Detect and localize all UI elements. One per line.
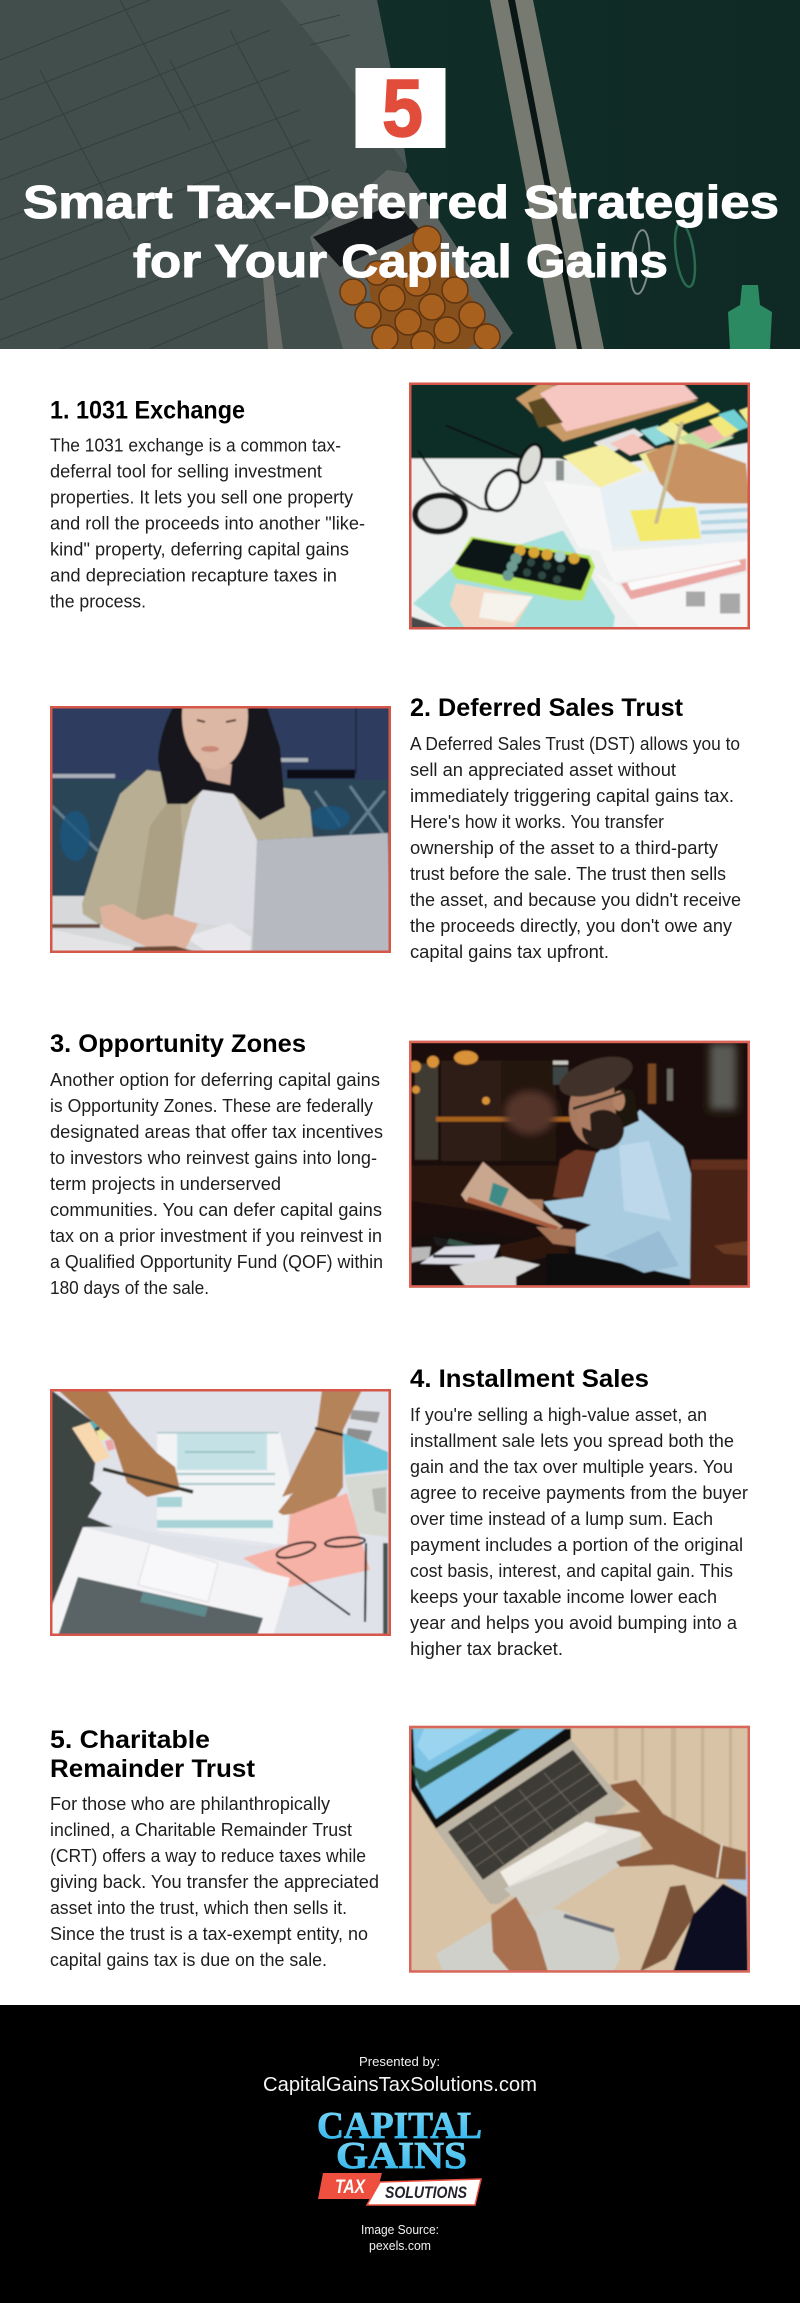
- logo: [317, 2105, 482, 2205]
- photo 1: desk with calculator, glasses and hand: [409, 382, 750, 630]
- logo: TAX: [335, 2177, 366, 2198]
- section 1 text: kind" property, deferring capital gains: [50, 540, 349, 560]
- section 5 text: capital gains tax is due on the sale.: [50, 1950, 327, 1970]
- section 2 text: ownership of the asset to a third-party: [410, 838, 718, 858]
- section 2 text: trust before the sale. The trust then sells: [410, 864, 726, 884]
- section 5 text: inclined, a Charitable Remainder Trust: [50, 1820, 352, 1840]
- section 4 text: 4. Installment Sales: [410, 1365, 649, 1393]
- section 1 text: and roll the proceeds into another "like-: [50, 514, 365, 534]
- image source: [361, 2222, 439, 2253]
- section 4 text: keeps your taxable income lower each: [410, 1587, 717, 1607]
- photo frame: [410, 384, 749, 628]
- section 5 text: asset into the trust, which then sells it.: [50, 1898, 347, 1918]
- footer panel: [0, 2005, 800, 2303]
- photo frame: [51, 707, 390, 952]
- section 2 text: capital gains tax upfront.: [410, 942, 609, 962]
- section 4 text: agree to receive payments from the buyer: [410, 1483, 748, 1503]
- title: Smart Tax-Deferred Strategies: [23, 176, 779, 228]
- photo 3: man reading newspaper: [409, 1041, 750, 1288]
- section 3 text: Another option for deferring capital gains: [50, 1070, 380, 1090]
- photo 4: hands filling form beside laptop: [50, 1389, 391, 1636]
- section 1 text: and depreciation recapture taxes in: [50, 566, 337, 586]
- section 5 text: 5. Charitable: [50, 1726, 210, 1754]
- image source: pexels.com: [369, 2238, 431, 2253]
- section 5 text: For those who are philanthropically: [50, 1794, 330, 1814]
- section 4 text: higher tax bracket.: [410, 1639, 563, 1659]
- section 5 text: giving back. You transfer the appreciated: [50, 1872, 379, 1892]
- logo: GAINS: [336, 2135, 467, 2177]
- logo: SOLUTIONS: [385, 2183, 468, 2202]
- section 3 text: to investors who reinvest gains into long-: [50, 1148, 377, 1168]
- website url: CapitalGainsTaxSolutions.com: [263, 2074, 537, 2096]
- section 3 text: 180 days of the sale.: [50, 1278, 209, 1298]
- section 1 text: [50, 396, 365, 612]
- logo: CAPITAL: [317, 2105, 482, 2147]
- section 1 text: The 1031 exchange is a common tax-: [50, 436, 341, 456]
- section 4 text: payment includes a portion of the original: [410, 1535, 743, 1555]
- header photo: calculator: [310, 170, 513, 355]
- section 2 text: the proceeds directly, you don't owe any: [410, 916, 732, 936]
- section 3 text: designated areas that offer tax incentives: [50, 1122, 383, 1142]
- section 4 text: [410, 1365, 748, 1659]
- number badge: 5: [382, 63, 423, 154]
- section 3 text: is Opportunity Zones. These are federally: [50, 1096, 373, 1116]
- title: for Your Capital Gains: [133, 235, 668, 287]
- section 4 text: cost basis, interest, and capital gain. This: [410, 1561, 733, 1581]
- section 4 text: installment sale lets you spread both the: [410, 1431, 734, 1451]
- section 1 text: properties. It lets you sell one property: [50, 488, 353, 508]
- section 2 text: [410, 694, 741, 962]
- header photo: paper clips and highlighter: [628, 222, 772, 349]
- presented by label: Presented by:: [359, 2054, 440, 2069]
- section 2 text: 2. Deferred Sales Trust: [410, 694, 684, 722]
- section 3 text: term projects in underserved: [50, 1174, 281, 1194]
- section 3 text: a Qualified Opportunity Fund (QOF) within: [50, 1252, 383, 1272]
- photo frame: [410, 1727, 749, 1971]
- section 4 text: If you're selling a high-value asset, an: [410, 1405, 707, 1425]
- section 1 text: 1. 1031 Exchange: [50, 396, 245, 424]
- section 2 text: immediately triggering capital gains tax.: [410, 786, 734, 806]
- header photo: tax form paper: [0, 0, 407, 349]
- section 4 text: over time instead of a lump sum. Each: [410, 1509, 713, 1529]
- photo frame: [410, 1042, 749, 1286]
- section 5 text: Remainder Trust: [50, 1755, 256, 1783]
- header photo: pencil on paper: [263, 275, 283, 349]
- section 3 text: 3. Opportunity Zones: [50, 1030, 306, 1058]
- title: [23, 176, 779, 287]
- section 2 text: the asset, and because you didn't receive: [410, 890, 741, 910]
- section 1 text: the process.: [50, 592, 146, 612]
- image source: Image Source:: [361, 2222, 439, 2237]
- number badge: [356, 68, 446, 148]
- section 5 text: (CRT) offers a way to reduce taxes while: [50, 1846, 366, 1866]
- header photo: pencils: [490, 0, 604, 349]
- section 3 text: communities. You can defer capital gains: [50, 1200, 382, 1220]
- section 4 text: gain and the tax over multiple years. You: [410, 1457, 733, 1477]
- photo 5: hands holding check over laptop: [409, 1726, 750, 1973]
- section 5 text: [50, 1726, 379, 1970]
- section 2 text: A Deferred Sales Trust (DST) allows you to: [410, 734, 740, 754]
- header panel: [0, 0, 800, 355]
- section 2 text: sell an appreciated asset without: [410, 760, 676, 780]
- photo frame: [51, 1390, 390, 1635]
- section 3 text: [50, 1030, 383, 1298]
- section 1 text: deferral tool for selling investment: [50, 462, 322, 482]
- section 2 text: Here's how it works. You transfer: [410, 812, 664, 832]
- photo 2: woman at laptop: [50, 706, 391, 953]
- section 5 text: Since the trust is a tax-exempt entity, no: [50, 1924, 368, 1944]
- section 3 text: tax on a prior investment if you reinvest in: [50, 1226, 382, 1246]
- section 4 text: year and helps you avoid bumping into a: [410, 1613, 738, 1633]
